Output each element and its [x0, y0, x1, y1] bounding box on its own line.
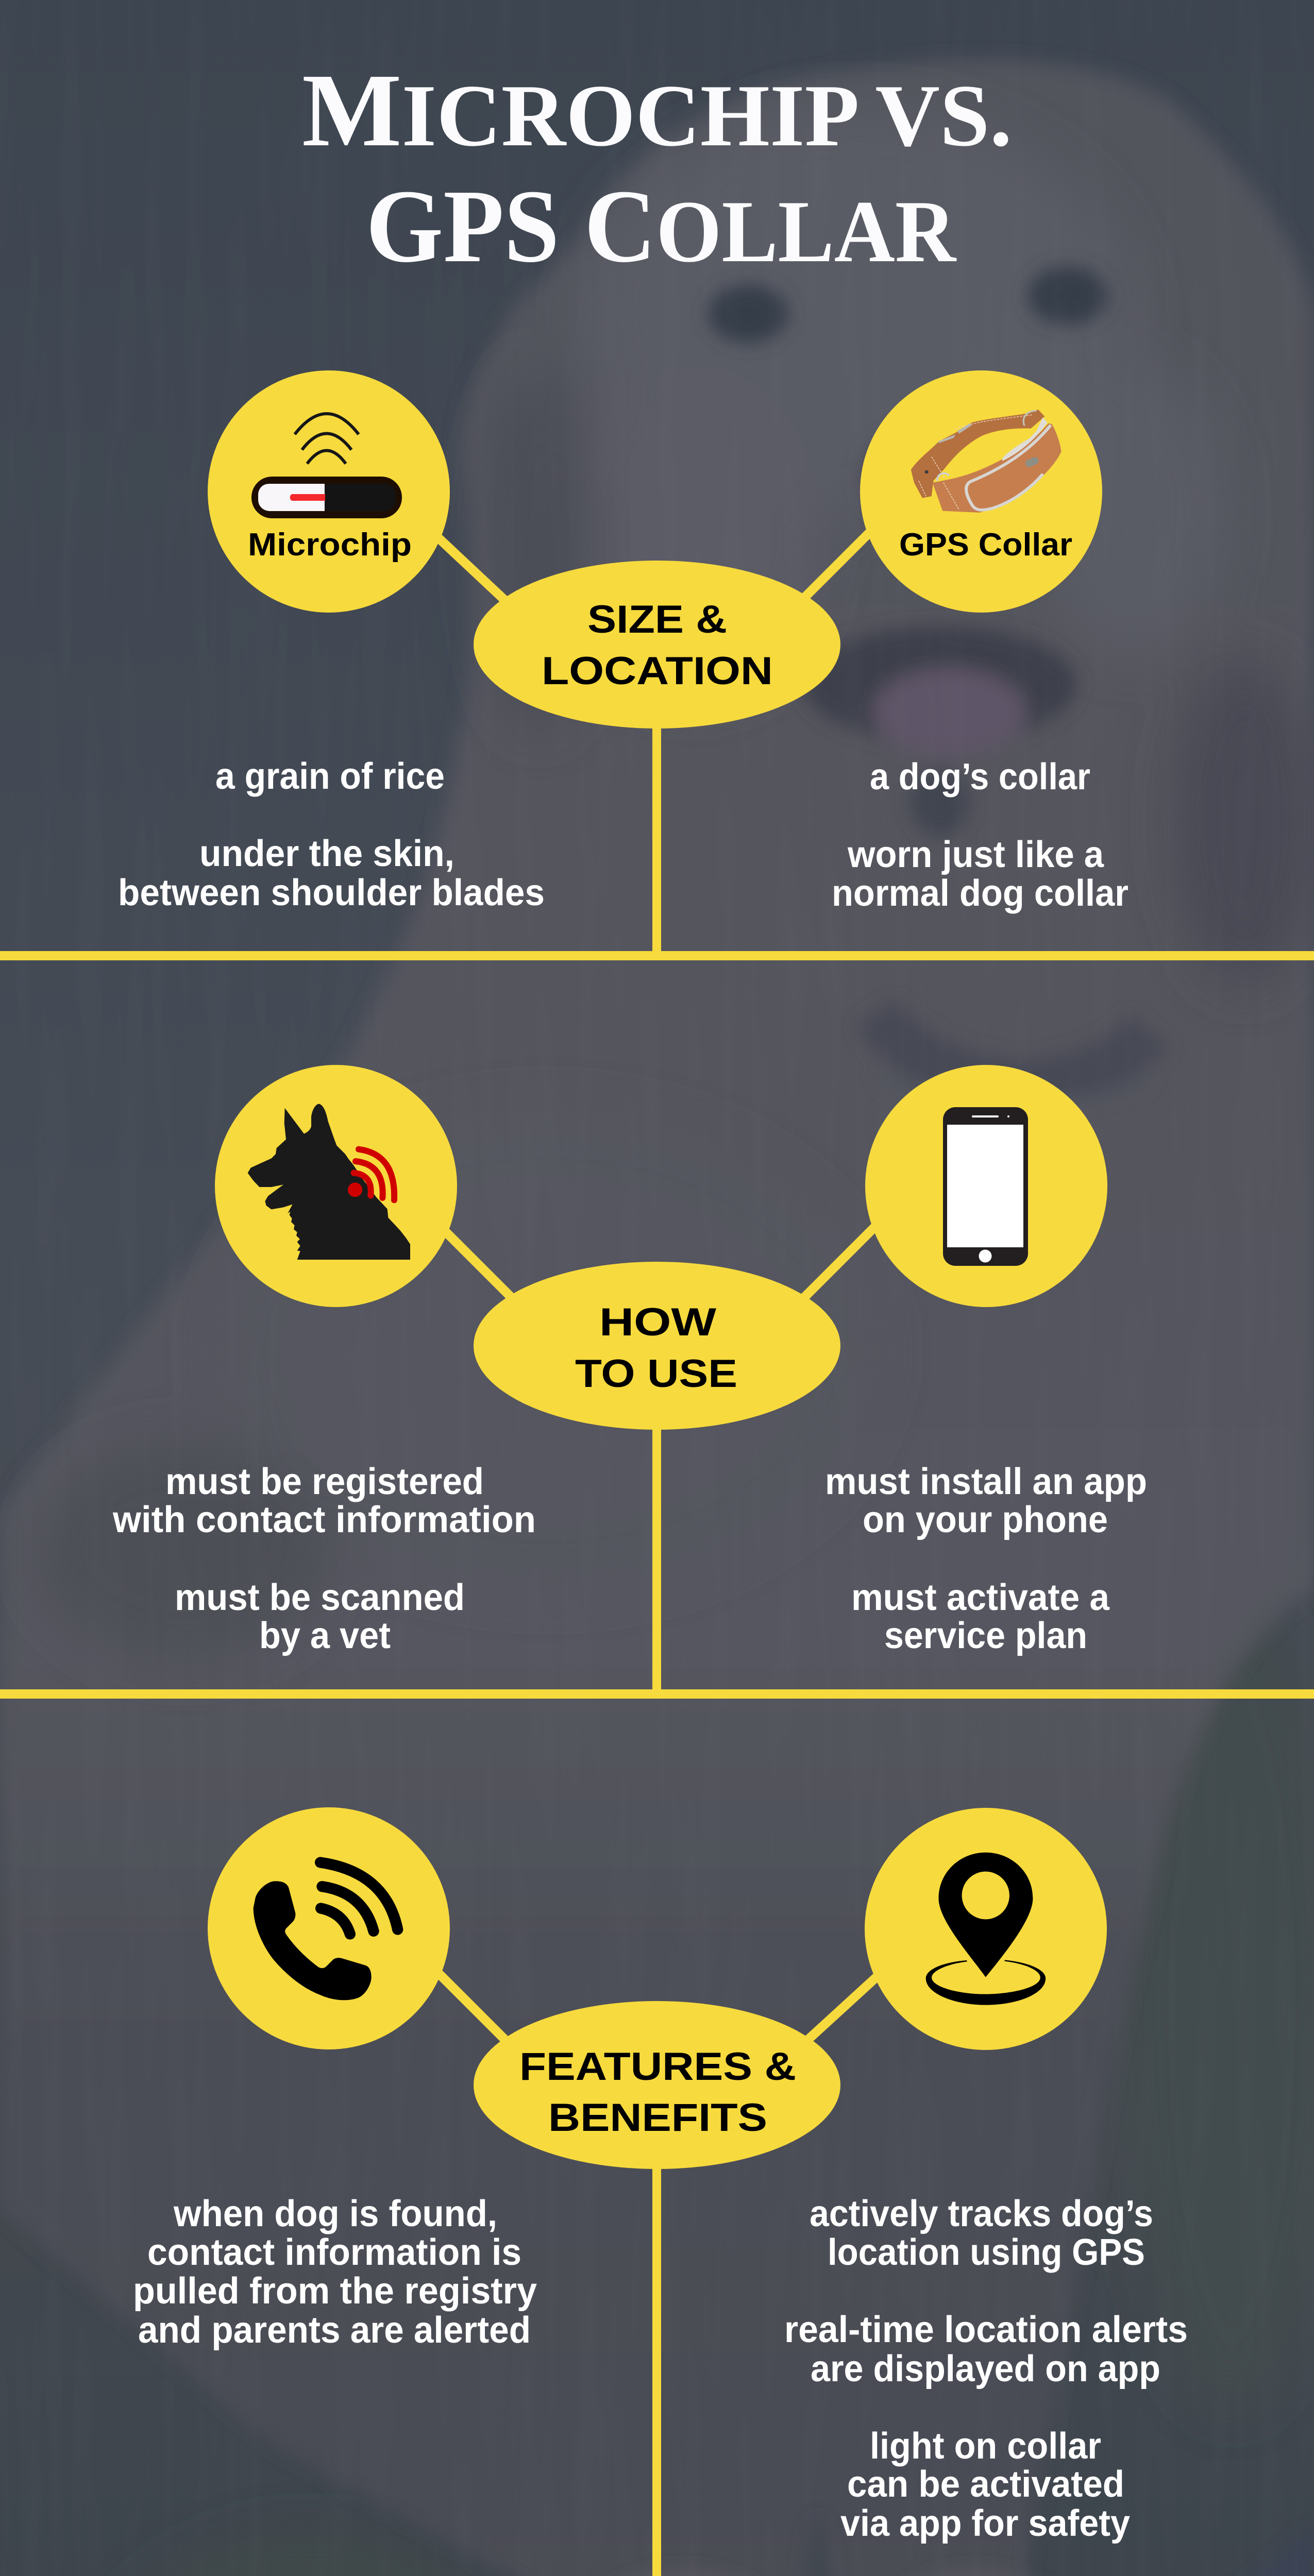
heading bubble: TO USE — [575, 1352, 737, 1396]
text: GPS collar features — [784, 2193, 1188, 2544]
text: microchip size and location: under the skin, — [199, 833, 454, 874]
text: microchip features — [133, 2193, 537, 2351]
title: GPS COLLAR — [366, 168, 957, 284]
text: GPS collar features: light on collar — [870, 2426, 1101, 2467]
icon: microchip: Microchip — [248, 527, 412, 563]
icon: GPS collar: GPS Collar — [899, 527, 1072, 563]
panel: features and benefits — [0, 1807, 1314, 2576]
text: microchip features: and parents are alerted — [138, 2310, 531, 2351]
panel: size and location — [0, 370, 1314, 960]
text: microchip features: pulled from the registry — [133, 2270, 537, 2312]
text: GPS collar features: real-time location alerts — [784, 2309, 1188, 2350]
text: GPS collar how to use: on your phone — [863, 1499, 1108, 1540]
heading bubble — [474, 561, 840, 728]
title — [302, 52, 1012, 284]
heading bubble: HOW — [599, 1300, 716, 1344]
text: GPS collar size and location: normal dog collar — [832, 873, 1128, 914]
heading bubble — [474, 1262, 840, 1430]
text: microchip how to use: with contact information — [112, 1499, 536, 1540]
icon: GPS collar — [860, 370, 1102, 613]
text: GPS collar features: via app for safety — [840, 2503, 1130, 2544]
title: MICROCHIP VS. — [302, 52, 1012, 168]
text: GPS collar size and location: a dog’s collar — [870, 756, 1090, 798]
text: GPS collar size and location — [832, 756, 1128, 914]
heading bubble: LOCATION — [542, 649, 773, 693]
text: microchip how to use: must be scanned — [175, 1577, 465, 1618]
panel: how to use — [0, 1065, 1314, 1699]
text: GPS collar how to use — [825, 1461, 1147, 1656]
text: microchip features: contact information is — [147, 2232, 521, 2273]
text: microchip how to use: by a vet — [259, 1615, 391, 1656]
text: microchip features: when dog is found, — [173, 2193, 497, 2234]
text: GPS collar features: actively tracks dog’s — [810, 2193, 1153, 2234]
text: GPS collar size and location: worn just like a — [847, 834, 1104, 875]
icon: map pin — [865, 1808, 1107, 2050]
text: microchip size and location: between shoulder blades — [118, 872, 545, 913]
heading bubble: FEATURES & — [519, 2045, 796, 2089]
heading bubble: SIZE & — [587, 598, 727, 641]
text: GPS collar how to use: must activate a — [851, 1577, 1110, 1618]
text: microchip how to use — [112, 1461, 536, 1656]
text: microchip how to use: must be registered — [165, 1461, 484, 1502]
text: GPS collar features: can be activated — [847, 2464, 1124, 2505]
heading bubble — [474, 2001, 840, 2169]
text: GPS collar features: are displayed on app — [811, 2348, 1160, 2389]
icon: dog with microchip signal — [215, 1065, 457, 1307]
text: GPS collar how to use: service plan — [884, 1615, 1087, 1656]
divider lines — [0, 526, 1314, 960]
divider lines — [0, 1219, 1314, 1699]
icon: smartphone — [865, 1065, 1107, 1307]
divider lines — [0, 1965, 1314, 2576]
text: microchip size and location: a grain of rice — [215, 756, 445, 797]
icon: microchip — [208, 370, 450, 613]
icon: ringing phone — [208, 1807, 450, 2049]
text: GPS collar how to use: must install an app — [825, 1461, 1147, 1502]
text: GPS collar features: location using GPS — [828, 2232, 1145, 2273]
text: microchip size and location — [118, 756, 545, 913]
heading bubble: BENEFITS — [548, 2096, 767, 2140]
